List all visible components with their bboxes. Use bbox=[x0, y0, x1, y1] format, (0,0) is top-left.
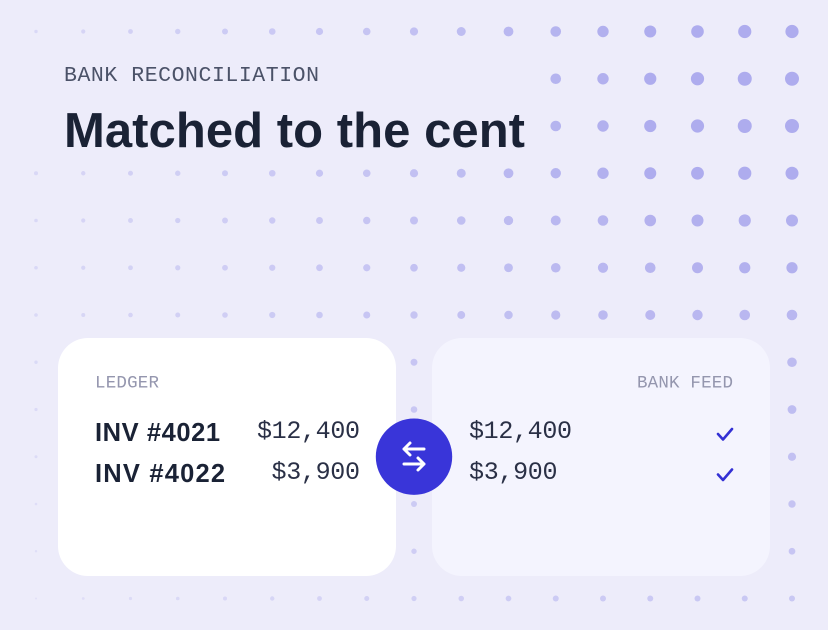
invoice 4021 amount: $12,400 bbox=[257, 417, 360, 446]
title: Matched to the cent bbox=[64, 104, 525, 158]
eyebrow heading: BANK RECONCILIATION bbox=[64, 64, 319, 88]
panel: ledger bbox=[58, 338, 396, 576]
icon: check 2 bbox=[718, 470, 732, 480]
invoice 4022 amount: $3,900 bbox=[272, 458, 360, 487]
invoice 4022 label: INV #4022 bbox=[95, 460, 225, 488]
ledger card background bbox=[58, 338, 396, 576]
icon: check 1 bbox=[718, 429, 732, 440]
invoice 4021 label: INV #4021 bbox=[95, 419, 220, 447]
bank feed heading: BANK FEED bbox=[637, 374, 733, 394]
bank feed amount 2: $3,900 bbox=[469, 458, 558, 487]
icon: swap arrows badge bbox=[376, 418, 452, 495]
panel: bank feed bbox=[432, 338, 770, 576]
ledger heading: LEDGER bbox=[95, 374, 159, 394]
bank feed card background bbox=[432, 338, 770, 576]
bank feed amount 1: $12,400 bbox=[469, 417, 572, 446]
